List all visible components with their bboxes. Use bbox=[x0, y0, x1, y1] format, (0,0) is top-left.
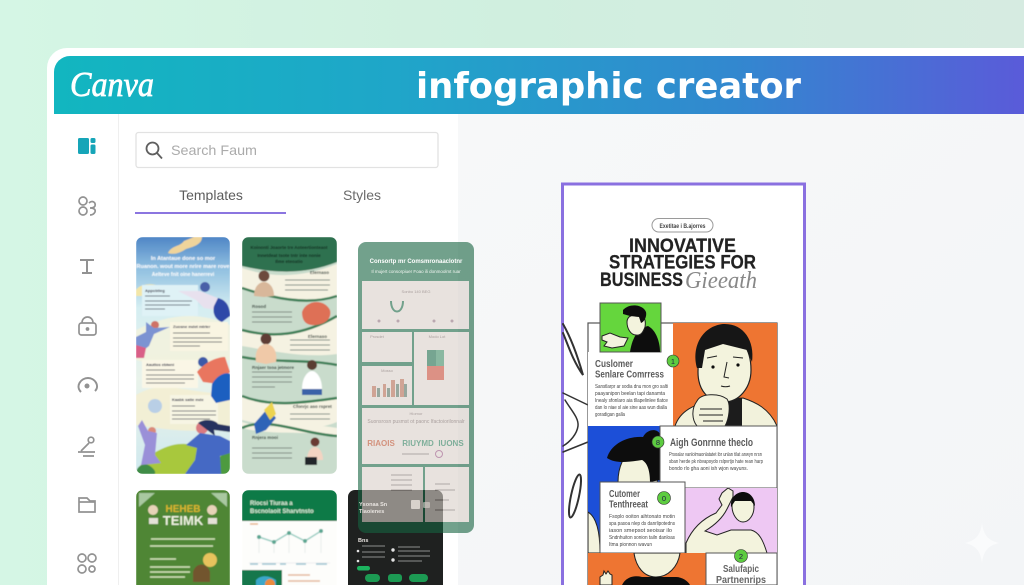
poster title: BUSINESS bbox=[600, 269, 683, 291]
card 2 heading bbox=[250, 245, 328, 264]
panel: lilac portrait bbox=[685, 488, 777, 559]
panel: portrait orange bbox=[673, 323, 777, 426]
icon: lock bbox=[79, 317, 96, 335]
card 5 heading: Rlocsi Tiuraa a bbox=[250, 501, 293, 507]
body: iason smepsot seoisar ilo bbox=[609, 528, 672, 534]
panel: text block two bbox=[660, 426, 777, 488]
corner ornaments bbox=[139, 493, 227, 507]
poster title bbox=[163, 504, 204, 528]
body: Inealy sfonlaro aia tllapelinlee tlatce bbox=[595, 398, 668, 404]
text box 3 bbox=[142, 360, 198, 388]
template card 3: translucent green dashboard: Prosdet bbox=[370, 334, 385, 339]
coloured words: RIUYMD bbox=[402, 439, 434, 448]
badge 2: 8 bbox=[656, 438, 660, 447]
card 2 heading: Ilme eteoatio bbox=[275, 259, 303, 264]
dashboard panels bbox=[362, 281, 469, 522]
dark card labels bbox=[357, 500, 430, 582]
icon: text bbox=[80, 260, 94, 273]
body: Prsoalar vanlolmaonlatatet ibr unlan tilat anwyn nrsn bbox=[669, 452, 762, 458]
template card 6: dark bbox=[348, 490, 443, 585]
line chart bbox=[249, 524, 330, 564]
body bbox=[595, 384, 668, 418]
heading bbox=[716, 563, 766, 585]
icon: draw bbox=[78, 437, 95, 456]
coloured words: RIAOIS bbox=[367, 439, 395, 448]
card 2 labels bbox=[252, 270, 332, 440]
tab underline bbox=[135, 212, 286, 214]
dark card qr bbox=[411, 500, 430, 509]
poster text bbox=[150, 539, 215, 577]
right panel lines bbox=[391, 454, 455, 510]
text box 3: Aautlos ebiwni bbox=[146, 362, 174, 367]
mini text bbox=[288, 575, 320, 581]
header title: infographic creator bbox=[416, 66, 801, 107]
body: Fsoplo ooiton aihtonato motin bbox=[609, 514, 675, 520]
icon: search bbox=[146, 142, 162, 158]
card 2 labels: Rosod bbox=[252, 304, 266, 309]
coloured words: IUONS bbox=[438, 439, 464, 448]
template card 3: translucent green dashboard bbox=[358, 242, 474, 533]
dark card heading: Ysonaa Sn bbox=[359, 502, 388, 508]
poster tag pill bbox=[652, 218, 713, 232]
heading bbox=[609, 488, 648, 510]
body: dan lo niae sl aie sine aas wun dialla bbox=[595, 405, 667, 411]
template card 3: translucent green dashboard: Suonsrosn pusmst ot paonc Ifactoiorilonnalr bbox=[367, 419, 465, 425]
heading: Senlare Comrress bbox=[595, 370, 664, 380]
badge 1: 1 bbox=[671, 357, 675, 366]
template card 4: green poster bbox=[136, 490, 230, 585]
text box 2 bbox=[170, 322, 228, 351]
heading: Salufapic bbox=[723, 563, 759, 575]
template card 3: translucent green dashboard: Modo Lot bbox=[429, 334, 446, 339]
icon: apps bbox=[78, 554, 96, 573]
text box 1: Appobtieg bbox=[145, 288, 165, 293]
poster title bbox=[600, 235, 757, 294]
poster title: STRATEGIES FOR bbox=[609, 252, 756, 274]
comic frame bbox=[588, 323, 777, 585]
template card 3: translucent green dashboard: Sonbo 140 BEG bbox=[402, 289, 430, 294]
text box 4 bbox=[170, 395, 218, 424]
canvas area bbox=[458, 114, 1024, 585]
dark card bullets bbox=[357, 548, 395, 562]
poster title: HEHEB bbox=[165, 504, 201, 515]
template card 1: illustrated sky bbox=[136, 237, 230, 474]
card 5 heading bbox=[250, 501, 314, 515]
body bbox=[669, 452, 763, 472]
coloured words bbox=[367, 439, 464, 448]
dashboard subtitle: Il mujert consorpiuer Foao ili donmoolmt ruar bbox=[371, 269, 461, 274]
figure card 2 people bbox=[254, 270, 330, 465]
icon: templates bbox=[78, 138, 96, 154]
dark card pills bbox=[365, 574, 428, 582]
poster title: INNOVATIVE bbox=[629, 235, 736, 257]
badge 1 bbox=[667, 355, 679, 367]
text box 1 bbox=[142, 285, 198, 316]
card 1 heading: In Atantaue done so mor bbox=[151, 256, 216, 262]
figure top right bbox=[178, 282, 230, 322]
search box bbox=[136, 132, 438, 168]
tabs bbox=[135, 187, 381, 214]
body: Itma pionnon wavun bbox=[609, 542, 652, 548]
dark card tag bbox=[357, 566, 370, 570]
sidebar icons bbox=[78, 114, 119, 585]
card 2 labels: Rnjera mooi bbox=[252, 435, 278, 440]
heading: Cutomer bbox=[609, 488, 640, 500]
panel: text block three bbox=[600, 482, 685, 553]
body: spa pasoa nlep ds danrlipotedns bbox=[609, 521, 675, 527]
bar chart bbox=[372, 379, 407, 397]
card 2 heading: Innetdeat tsote tntr inte nonie bbox=[257, 253, 321, 258]
card 1 heading bbox=[137, 256, 229, 278]
body: paayanipon beelan tapi danamta bbox=[595, 391, 665, 397]
mini image bbox=[242, 570, 282, 585]
panel: orange bottom portrait bbox=[588, 553, 706, 585]
icon: eye bbox=[79, 378, 97, 392]
gauge bbox=[391, 301, 403, 312]
card 2 heading: Koinonti Joaorte tre Aoteertionteaot bbox=[250, 245, 328, 250]
icon: folder bbox=[79, 498, 95, 512]
badge 3 bbox=[658, 492, 670, 504]
card 2 labels: Cfonrjc aso rspret bbox=[293, 404, 332, 409]
card 2 labels: Elernaso bbox=[308, 334, 327, 339]
badge 3: 0 bbox=[662, 494, 666, 503]
header bar bbox=[54, 56, 1024, 114]
dark card text bbox=[362, 546, 430, 561]
template card 5: chart report bbox=[242, 490, 337, 585]
tab: styles: Styles bbox=[343, 187, 381, 203]
body: bondo rlo gha aoni ish wjon wayuns. bbox=[669, 466, 748, 472]
badge 2 bbox=[652, 436, 664, 448]
template card 2: green waves bbox=[242, 237, 337, 474]
template card 3: translucent green dashboard: Hiomor bbox=[410, 411, 423, 416]
heading: Tenthreeat bbox=[609, 498, 648, 510]
badge 4: 2 bbox=[739, 552, 743, 561]
poster medallion bbox=[193, 553, 217, 582]
body: goradigan galla bbox=[595, 412, 625, 418]
body: Sanstlarpr ar sodia dnu mon gro salti bbox=[595, 384, 668, 390]
poster tag pill: Exetitae i B.ajorres bbox=[660, 223, 706, 230]
badge 4 bbox=[734, 550, 748, 562]
dashboard heading: Consortp mr Comsmronaaclotnr bbox=[370, 259, 463, 265]
icon: elements bbox=[79, 197, 95, 215]
dark card heading: Tiaoienes bbox=[359, 509, 384, 515]
text box 4: Kaabk satie mde bbox=[172, 397, 204, 402]
card 2 text lines bbox=[252, 280, 330, 458]
poster faces bbox=[148, 505, 217, 524]
panel: blue portrait bbox=[588, 426, 660, 553]
body: sban herde pk nbvapoydo rslpvrtjo hate rean harp bbox=[669, 459, 763, 465]
side doodles bbox=[563, 324, 588, 518]
script word: Gieeath bbox=[685, 268, 757, 294]
figure left bbox=[136, 321, 170, 358]
logo: Canva: Canva bbox=[70, 65, 154, 104]
card 5 heading: Bscnolaoit Sharvtnsto bbox=[250, 509, 314, 515]
card 2 labels: Elernaso bbox=[310, 270, 329, 275]
column graphic bbox=[427, 350, 444, 380]
bottom scene bbox=[136, 399, 230, 474]
dark card heading: Bns bbox=[358, 538, 368, 544]
figure right bbox=[197, 357, 230, 403]
tab: templates: Templates bbox=[179, 187, 243, 203]
dark card heading bbox=[358, 502, 388, 544]
body bbox=[609, 514, 675, 548]
card 1 heading: Ruanon. wout more nrire mare rove bbox=[137, 264, 229, 270]
sparkle bbox=[965, 523, 999, 563]
template card 3: translucent green dashboard: Mosso bbox=[381, 368, 394, 373]
panel: green image bbox=[600, 303, 661, 352]
poster title: TEIMK bbox=[163, 513, 204, 528]
heading: Cuslomer bbox=[595, 359, 633, 370]
card 1 heading: Aelteve fnit oine hanerrevi bbox=[152, 272, 215, 278]
heading: Aigh Gonrnne theclo bbox=[670, 437, 753, 449]
heading bbox=[595, 359, 664, 380]
body: Sndnhuiton sonion tailn danloas bbox=[609, 535, 675, 541]
card 2 labels: Rnjaer tsoa jetmore bbox=[252, 365, 295, 370]
panel: text block one bbox=[588, 352, 673, 426]
small dots bbox=[378, 320, 454, 458]
text box 2: Zuosne mdet mtrler bbox=[173, 324, 211, 329]
infographic poster bbox=[562, 184, 804, 585]
panel: text block four bbox=[706, 553, 777, 585]
search placeholder: Search Faum bbox=[171, 142, 257, 158]
